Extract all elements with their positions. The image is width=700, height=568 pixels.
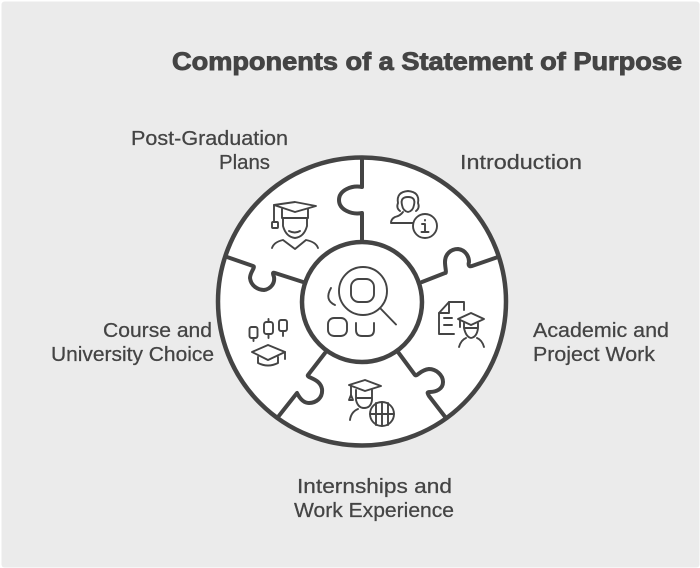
label: Internships and Work Experience: Internships and (297, 476, 452, 498)
divider: top puzzle joint (339, 158, 362, 242)
icon: candlesticks with cap (250, 319, 287, 366)
icon: person with info badge (391, 191, 437, 238)
inner hub circle (302, 242, 422, 362)
label: Internships and Work Experience: Work Experience (294, 500, 454, 522)
label: Introduction: Introduction (460, 152, 582, 174)
outer ring (218, 158, 506, 446)
puzzle wheel (218, 158, 506, 446)
divider: upper left puzzle joint (227, 257, 303, 290)
label: Post-Graduation Plans: Plans (219, 152, 270, 174)
title: Components of a Statement of Purpose (172, 48, 682, 76)
divider: lower right puzzle joint (398, 352, 446, 418)
divider: lower left puzzle joint (278, 353, 325, 417)
label: Academic and Project Work: Project Work (533, 344, 656, 366)
label: Academic and Project Work: Academic and (533, 320, 669, 342)
icon: hub magnifier (328, 267, 396, 336)
icon: graduate with globe (349, 380, 394, 426)
icon: graduate (272, 202, 318, 249)
label: Course and University Choice: University Choice (51, 344, 214, 366)
label: Course and University Choice: Course and (103, 320, 212, 342)
label: Post-Graduation Plans: Post-Graduation (131, 128, 288, 150)
label: Post-Graduation Plans (131, 128, 288, 174)
label: Academic and Project Work (533, 320, 669, 366)
divider: right puzzle joint (422, 249, 498, 282)
icon: document with graduate (439, 302, 484, 347)
label: Internships and Work Experience (294, 476, 454, 522)
label: Course and University Choice (51, 320, 214, 366)
